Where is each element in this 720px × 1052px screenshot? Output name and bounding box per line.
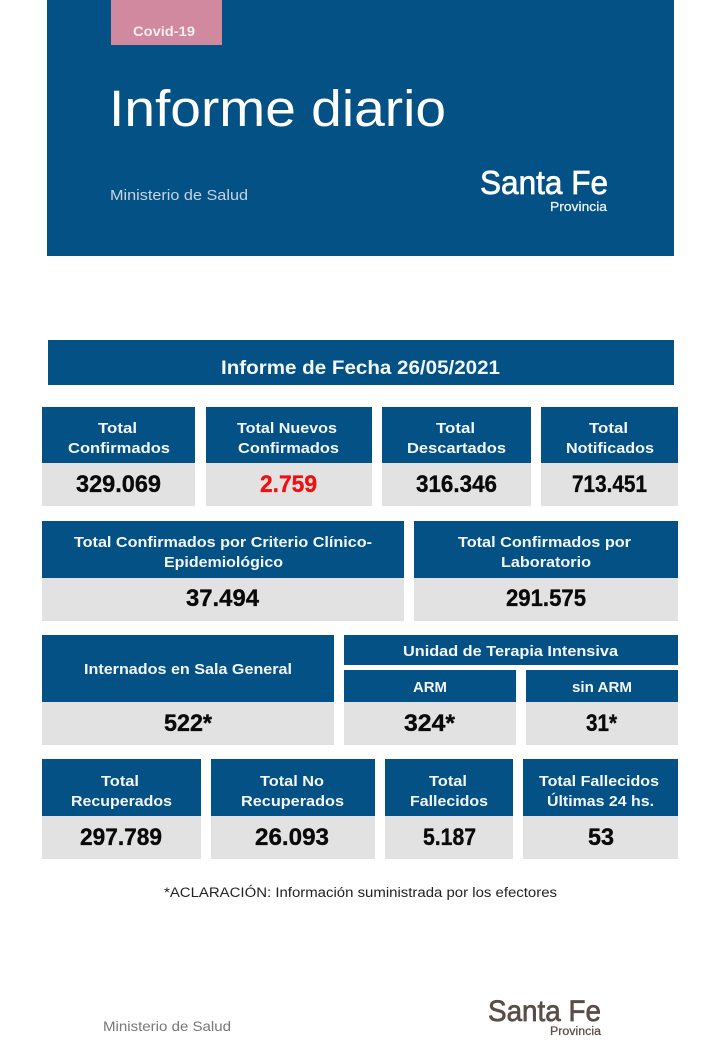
card: Internados en Sala General	[42, 635, 334, 745]
card: Total No Recuperados: Total No	[260, 773, 324, 790]
card: Confirmados por Laboratorio: Total Confirmados por	[458, 534, 631, 551]
card: Total Nuevos Confirmados: 2.759	[260, 471, 317, 498]
heading: Unidad de Terapia Intensiva: Unidad de Terapia Intensiva	[403, 643, 619, 660]
report date bar: Informe de Fecha 26/05/2021	[221, 357, 500, 379]
card: Total Notificados: Notificados	[566, 440, 654, 457]
logo: Santa Fe Provincia: Santa Fe	[480, 164, 608, 201]
card: Total Recuperados	[42, 759, 201, 859]
card: Total Descartados: Total	[436, 420, 475, 437]
card: Total Fallecidos Últimas 24 hs.: Total Fallecidos	[539, 773, 659, 790]
card: sin ARM: 31*	[586, 710, 617, 737]
footer logo: Santa Fe Provincia: Provincia	[550, 1026, 602, 1038]
card: Total Notificados: Total	[589, 420, 628, 437]
title: Informe diario	[109, 80, 446, 137]
card: ARM: 324*	[404, 710, 455, 737]
card: Total Recuperados: 297.789	[80, 824, 162, 851]
card: Confirmados por Laboratorio: Laboratorio	[501, 554, 591, 571]
card: Total Fallecidos Últimas 24 hs.: Últimas 24 hs.	[547, 792, 654, 810]
card: Total Descartados	[382, 407, 531, 506]
card: Internados en Sala General: Internados en Sala General	[84, 661, 292, 678]
report date bar	[48, 340, 674, 385]
card: sin ARM: sin ARM	[572, 679, 632, 696]
card: Total No Recuperados: 26.093	[255, 824, 329, 851]
card: Total Confirmados: Confirmados	[68, 440, 170, 457]
card: Confirmados por Laboratorio: 291.575	[506, 585, 586, 612]
footer ministry label: Ministerio de Salud	[103, 1018, 231, 1034]
card: Total Notificados: 713.451	[572, 471, 647, 498]
card: sin ARM	[526, 670, 678, 745]
footnote: *ACLARACIÓN: Información suministrada por los efectores	[164, 885, 557, 900]
card: Criterio Clínico-Epidemiológico: Total Confirmados por Criterio Clínico-	[74, 534, 372, 551]
card: Total No Recuperados: Recuperados	[241, 793, 344, 810]
card: Total Nuevos Confirmados: Confirmados	[238, 440, 339, 457]
card: ARM: ARM	[413, 679, 447, 696]
card: Total Fallecidos Últimas 24 hs.: 53	[588, 824, 614, 851]
heading: Unidad de Terapia Intensiva	[344, 635, 678, 665]
card: Internados en Sala General: 522*	[164, 710, 212, 737]
card: Total Confirmados: Total	[98, 420, 137, 437]
card: Total Fallecidos: 5.187	[423, 824, 476, 851]
tag: Covid-19: Covid-19	[133, 24, 195, 39]
card: Total Fallecidos	[385, 759, 513, 859]
card: Total Recuperados: Recuperados	[71, 793, 172, 810]
card: Total Fallecidos: Fallecidos	[410, 793, 488, 810]
card: Total Confirmados	[42, 407, 195, 506]
header banner	[47, 0, 674, 256]
ministry label: Ministerio de Salud	[110, 187, 248, 204]
card: ARM	[344, 670, 516, 745]
card: Criterio Clínico-Epidemiológico: Epidemiológico	[164, 554, 283, 571]
card: Total Fallecidos: Total	[429, 773, 467, 790]
card: Total Descartados: Descartados	[407, 440, 506, 457]
card: Total Descartados: 316.346	[416, 471, 497, 498]
card: Total Confirmados: 329.069	[76, 471, 161, 498]
footer logo: Santa Fe Provincia: Santa Fe	[488, 995, 601, 1028]
card: Total No Recuperados	[211, 759, 375, 859]
logo: Santa Fe Provincia: Provincia	[550, 200, 607, 214]
card: Confirmados por Laboratorio	[414, 521, 678, 621]
card: Total Fallecidos Últimas 24 hs.	[523, 759, 678, 859]
tag: Covid-19	[111, 0, 222, 45]
card: Total Nuevos Confirmados	[206, 407, 372, 506]
card: Criterio Clínico-Epidemiológico	[42, 521, 404, 621]
card: Criterio Clínico-Epidemiológico: 37.494	[186, 585, 259, 612]
card: Total Recuperados: Total	[101, 773, 139, 790]
card: Total Notificados	[541, 407, 678, 506]
card: Total Nuevos Confirmados: Total Nuevos	[237, 420, 337, 437]
